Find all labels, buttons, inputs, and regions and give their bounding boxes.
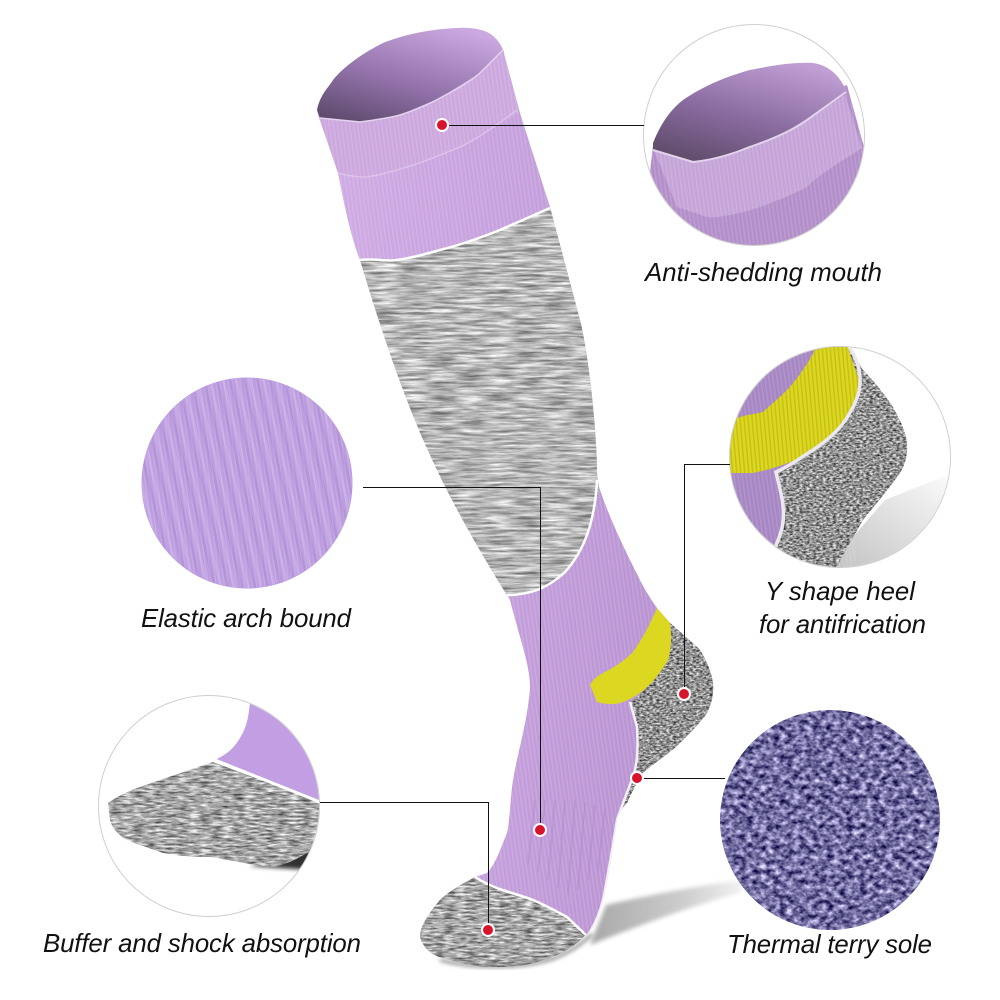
callout circle: Y shape heel — [729, 346, 951, 568]
marker: heel — [678, 688, 690, 700]
label: heel: Y shape heel — [765, 578, 916, 606]
white seam on heel — [590, 702, 638, 932]
connector: terry — [637, 778, 725, 780]
toe purple — [216, 704, 319, 800]
toe white seam — [215, 760, 320, 802]
callout circle: elastic arch — [140, 375, 355, 590]
label: mouth: Anti-shedding mouth — [643, 259, 882, 287]
yellow ribs — [725, 346, 859, 473]
heel yellow band — [725, 346, 859, 473]
grey toe panel — [420, 877, 586, 967]
white seam on toe — [475, 877, 588, 937]
mouth interior — [653, 63, 846, 162]
marker: buffer — [482, 924, 494, 936]
callout circle: buffer — [98, 696, 330, 916]
mouth band — [653, 95, 862, 217]
cuff rib texture — [317, 50, 520, 177]
marker: mouth — [436, 119, 448, 131]
connector: arch — [363, 488, 540, 830]
white seam on shin panel — [360, 208, 597, 595]
mouth lip highlight — [653, 92, 846, 162]
marker: terry — [631, 772, 643, 784]
floor shadow of the sock — [590, 880, 745, 945]
toe grey terry — [108, 762, 319, 867]
label: buffer: Buffer and shock absorption — [43, 930, 361, 958]
purple background — [730, 347, 848, 558]
yellow heel band — [590, 608, 671, 704]
toe shadow — [250, 846, 312, 872]
mouth band ribs — [653, 95, 862, 217]
callout circle: terry sole — [715, 705, 945, 935]
sock silhouette body — [318, 52, 714, 967]
label: heel — [759, 578, 926, 639]
cuff lip highlight — [320, 50, 503, 122]
label: arch: Elastic arch bound — [141, 605, 353, 633]
callout circle: anti-shedding mouth — [640, 24, 870, 260]
grey shin panel — [360, 208, 599, 594]
cuff lower fold — [338, 110, 517, 177]
ribbed cuff — [317, 50, 520, 177]
heel white seam — [775, 348, 860, 548]
main sock illustration — [300, 20, 730, 980]
outer wall of mouth — [650, 85, 864, 245]
ankle ribs — [528, 800, 605, 895]
toe underside shadow — [440, 934, 592, 966]
connector: heel — [684, 464, 730, 694]
heel grey terry — [777, 348, 908, 567]
grey heel panel — [618, 623, 714, 816]
label: terry: Thermal terry sole — [727, 931, 932, 959]
heel shadow — [828, 479, 948, 567]
label: heel: for antifrication — [759, 611, 926, 639]
connector: buffer — [320, 802, 488, 929]
sock opening interior — [317, 28, 504, 124]
connector: mouth — [441, 124, 644, 126]
marker: arch — [534, 824, 546, 836]
